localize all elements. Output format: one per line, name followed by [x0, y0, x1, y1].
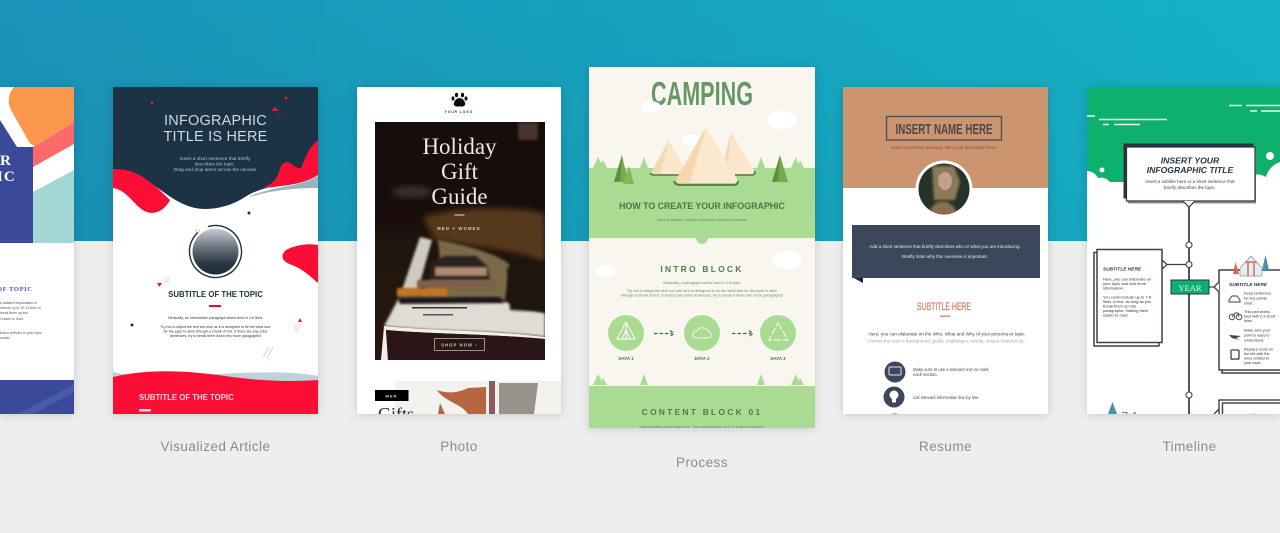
list text 4: Replace icons on	[1244, 348, 1273, 352]
left text box: information.	[1103, 286, 1124, 290]
circular photo	[188, 224, 242, 278]
list text 4: your topic.	[1244, 361, 1262, 365]
icon: bus	[1231, 350, 1239, 360]
list text 3: understand.	[1244, 338, 1264, 342]
tent illustration	[1233, 255, 1269, 276]
section heading: Gifts	[378, 404, 414, 424]
icon: paw logo	[452, 93, 468, 107]
card: Timeline	[1087, 87, 1280, 433]
process step 2	[684, 315, 720, 361]
mountains	[650, 127, 755, 185]
hero title: Holiday	[422, 134, 497, 159]
men tag: MEN	[386, 394, 397, 398]
footer band	[0, 380, 74, 414]
paragraph: Try not to adjust the text box size as it is designed to be the ideal size	[160, 325, 271, 329]
right text box	[1219, 270, 1280, 373]
list text 1: Make sure to use a relevant icon to mark	[913, 367, 990, 372]
content block text: Insert subtitle of the topic here. You might include up to 5 lines of text here.	[639, 425, 765, 429]
grey wave accent	[250, 176, 318, 197]
caption: Photo: Photo	[440, 439, 478, 454]
list text 4: the left with the	[1244, 352, 1270, 356]
left text box: paragraphs, making them	[1103, 308, 1149, 313]
red footer	[113, 371, 318, 414]
lower text box	[1214, 400, 1280, 433]
paragraph: sentences, try to break them down into more paragraphs!	[170, 334, 261, 338]
process step 3	[760, 315, 796, 361]
intro text: Insert a short sentence that briefly	[180, 156, 251, 161]
avatar	[916, 160, 972, 218]
body text: Here, you can elaborate on the Who, What and Why of your persona or topic.	[868, 332, 1026, 336]
hero title: Gift	[441, 159, 479, 184]
shop now button	[434, 338, 484, 350]
lower tree	[1108, 402, 1117, 414]
title divider	[454, 214, 464, 216]
card: Photo	[357, 87, 561, 424]
left text box: easier to read.	[1103, 312, 1129, 318]
red blob left	[113, 169, 170, 213]
subtitle dash	[940, 316, 950, 317]
caption: Process: Process	[676, 455, 728, 470]
process step 3: DATA 3	[770, 356, 786, 361]
list text 1: Keep sentences	[1244, 292, 1271, 296]
intro text: Drag and drop items across the canvas!	[174, 167, 256, 172]
icon: light bulb	[884, 386, 904, 408]
left text box: lines of text, as long as you	[1103, 299, 1151, 304]
year tag	[1171, 280, 1209, 294]
subheading: Back to basics: Subtitle should be short and concise	[657, 217, 747, 222]
list text 2: List relevant information line by line.	[913, 395, 980, 400]
lower heading fragment: Z 1	[1121, 410, 1139, 424]
intro text: Try not to adjust the text box size as it is designed to be the ideal size for the eyes to skim	[627, 289, 777, 293]
body text fragment: t easier to read.	[0, 317, 24, 321]
red blob mid right	[282, 244, 318, 283]
title box: INSERT YOUR	[1161, 156, 1220, 166]
card: Resume	[843, 87, 1048, 434]
name box: INSERT NAME HERE	[896, 121, 992, 138]
footer dash	[139, 409, 151, 412]
icon: monitor	[884, 362, 906, 382]
title: TITLE IS HERE	[163, 129, 268, 145]
card: partially visible template	[0, 87, 74, 414]
body text fragment: break them up into	[0, 311, 28, 315]
process step 1: DATA 1	[618, 356, 634, 361]
arrow	[654, 330, 674, 336]
process step 2: DATA 2	[694, 356, 710, 361]
green ground	[589, 168, 815, 238]
process step 1	[608, 315, 644, 361]
name box	[886, 116, 1002, 140]
card: Process	[589, 67, 815, 429]
title: CAMPING	[651, 75, 753, 112]
red dash	[209, 305, 221, 307]
product strip	[395, 381, 561, 414]
red blob upper right	[262, 140, 318, 188]
right connector	[1209, 282, 1219, 292]
header subtitle: Insert a customer persona, title or job description here.	[891, 145, 997, 150]
content block heading: CONTENT BLOCK 01	[642, 407, 762, 417]
left text box: Here, you can elaborate on	[1103, 276, 1151, 282]
card: Visualized Article	[113, 87, 318, 414]
title box	[1124, 144, 1256, 207]
caption: Visualized Article: Visualized Article	[161, 439, 270, 454]
intro panel: Briefly state why this overview is important.	[902, 254, 988, 259]
left text box: SUBTITLE HERE	[1103, 266, 1142, 272]
timeline nodes	[1186, 242, 1192, 398]
list text 4: ones related to	[1244, 356, 1269, 360]
title box: briefly describes the topic.	[1164, 185, 1216, 190]
list text 1: for key points	[1244, 296, 1267, 300]
intro text: describes the topic.	[195, 162, 235, 166]
caption: Resume: Resume	[919, 439, 972, 454]
left text box	[1094, 250, 1162, 346]
icon: car	[1229, 296, 1240, 302]
body text: Outline the topic's background, goals, challenges, needs, unique features etc.	[868, 338, 1026, 344]
left text box: your topic and add more	[1103, 281, 1147, 286]
left connector	[1162, 260, 1186, 269]
intro text: through a chunk of text. If there's any extra sentences, try to break it down into more paragraphs!	[621, 294, 783, 298]
content block band	[589, 386, 815, 428]
green header with clouds	[1087, 87, 1280, 182]
paragraph: Generally, an introduction paragraph works best in 4-6 lines.	[168, 316, 263, 320]
men tag	[375, 390, 408, 401]
body text fragment: that is relevant to your topic,	[0, 331, 42, 335]
body text fragment: include up to 10-14 lines of	[0, 306, 41, 310]
timeline spine	[1188, 206, 1190, 414]
title: INFOGRAPHIC	[164, 113, 267, 129]
list text 1: each section.	[913, 372, 938, 377]
hero caption: MEN + WOMEN	[437, 226, 481, 231]
list text 2: lines.	[1244, 319, 1253, 323]
title box: INFOGRAPHIC TITLE	[1147, 165, 1233, 175]
cloud dots	[1100, 152, 1274, 172]
subtitle: SUBTITLE OF THE TOPIC	[168, 290, 263, 299]
section notch	[696, 238, 708, 244]
dark header shape	[113, 87, 318, 209]
trees	[593, 155, 804, 385]
footer subtitle: SUBTITLE OF THE TOPIC	[139, 393, 234, 402]
body text fragment: reader.	[0, 336, 11, 340]
arrow	[732, 330, 753, 336]
left text box: You could include up to 7-8	[1103, 294, 1152, 300]
list text 2: best with 2-3 short	[1244, 314, 1276, 318]
paragraph: for the eyes to skim through a chunk of text. If there are any extra	[164, 330, 267, 334]
hero photo	[375, 122, 545, 360]
list text 1: short.	[1244, 302, 1254, 306]
cover shapes	[0, 87, 74, 243]
list text 3: point is easy to	[1244, 334, 1269, 338]
cover title fragment: R	[0, 153, 12, 169]
body text fragment: a detailed explanation of	[0, 301, 37, 305]
intro panel	[852, 225, 1040, 283]
right text box: SUBTITLE HERE	[1229, 282, 1268, 288]
logo caption: YOUR LOGO	[445, 110, 473, 114]
title box: Insert a subtitle here or a short sentence that	[1145, 179, 1235, 184]
shop now button: SHOP NOW ›	[441, 342, 478, 348]
subtitle: SUBTITLE HERE	[917, 301, 971, 313]
list text 2: This part works	[1244, 310, 1270, 314]
icon: next list item	[884, 414, 906, 434]
intro text: Generally, a paragraph works best in 4-6 lines.	[663, 281, 741, 285]
year tag: YEAR	[1178, 283, 1202, 293]
decorative dots	[130, 96, 302, 358]
clouds	[596, 101, 802, 277]
hero title: Guide	[431, 184, 488, 209]
caption: Timeline: Timeline	[1162, 439, 1217, 454]
list text 3: Make sure your	[1244, 328, 1271, 332]
tan header	[843, 87, 1048, 188]
heading: HOW TO CREATE YOUR INFOGRAPHIC	[619, 201, 785, 211]
icon: bicycle	[1229, 313, 1242, 320]
grey wave footer accent	[113, 372, 318, 381]
intro heading: INTRO BLOCK	[660, 264, 744, 274]
icon: airplane	[1229, 335, 1241, 340]
intro panel: Add a short sentence that briefly describes who or what you are introducing.	[869, 244, 1021, 249]
wind lines	[1087, 106, 1280, 124]
left text box: break them up into	[1103, 304, 1137, 308]
